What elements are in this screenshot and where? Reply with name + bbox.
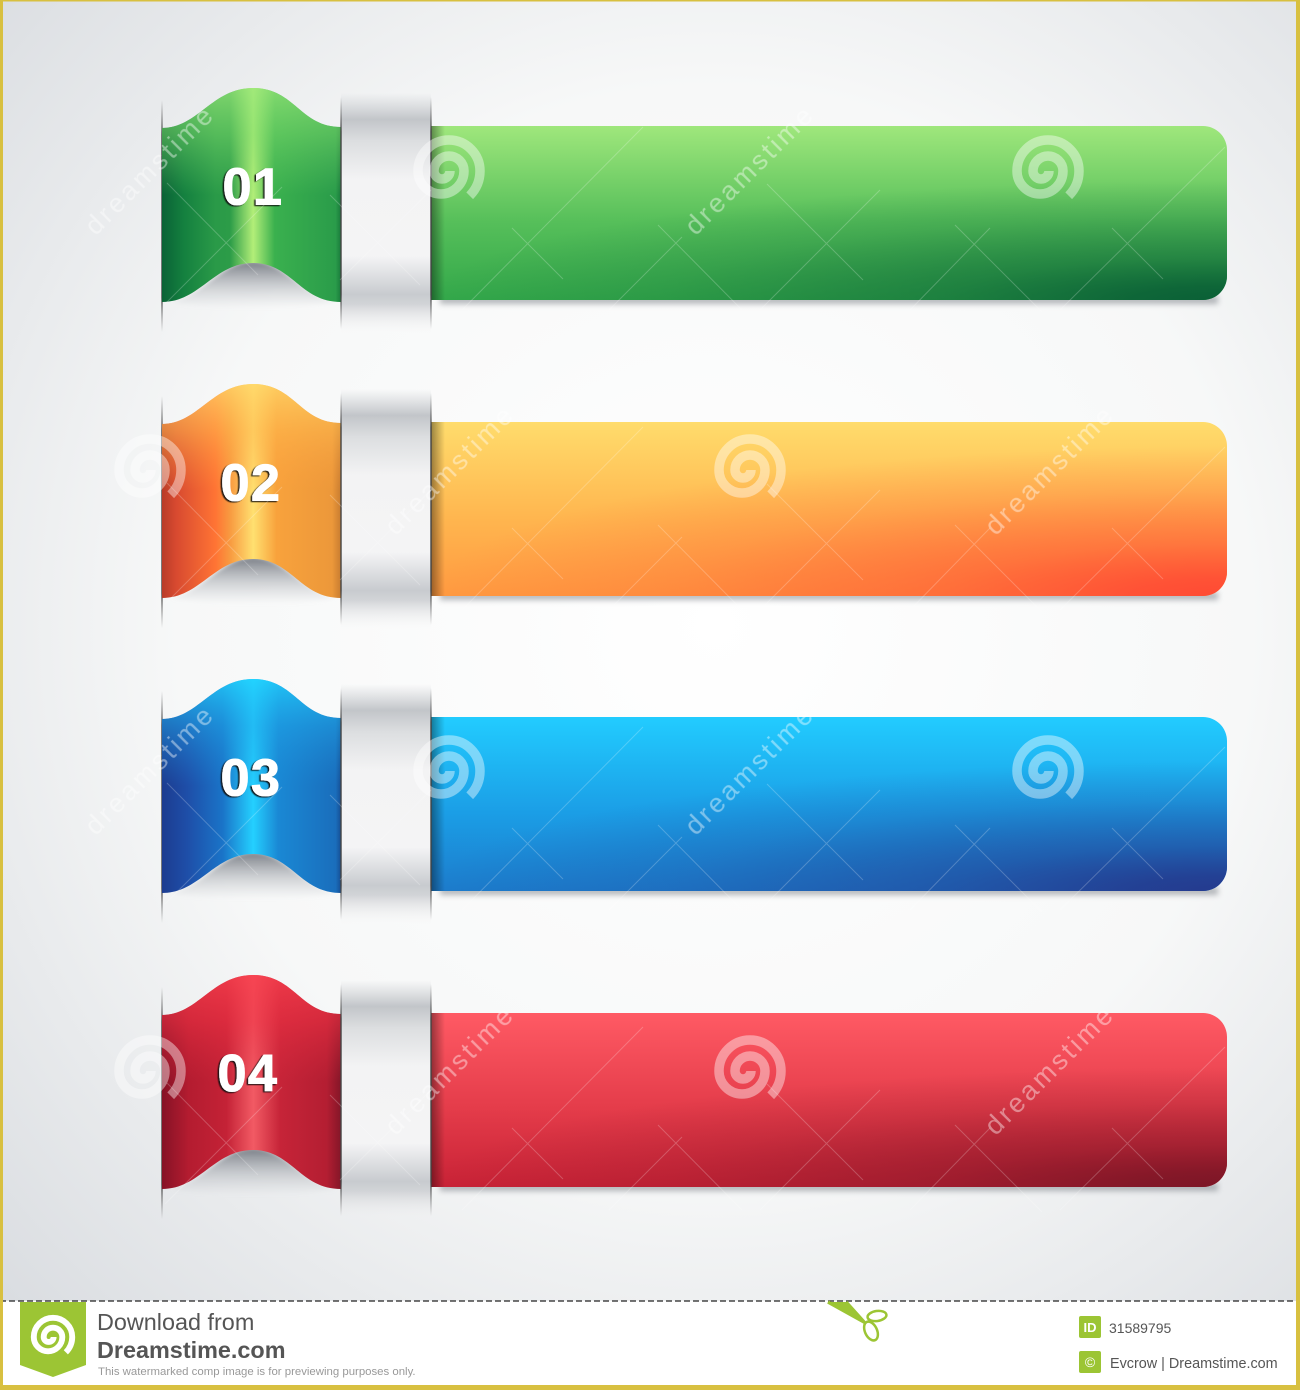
brand name: Dreamstime.com [97,1337,286,1363]
footer [0,1301,1300,1390]
banner row 2: orange [161,384,1227,629]
number 04: 04 [218,1045,278,1103]
left slit [161,691,163,923]
watermark text: dreamstime [79,699,221,841]
paper band [340,684,432,924]
bar [431,422,1227,596]
number 01: 01 [223,158,283,216]
dashed cut line [0,1300,1300,1302]
image id: 31589795 [1109,1320,1172,1336]
bar [431,126,1227,300]
paper band [340,980,432,1220]
ribbon tab [162,88,341,302]
download heading: Download from [97,1309,254,1335]
ribbon shadow [172,852,336,899]
bar shadow [440,592,1218,600]
disclaimer: This watermarked comp image is for previewing purposes only. [98,1366,416,1378]
icon: copyright badge: © [1085,1354,1096,1370]
icon: scissors [828,1302,887,1343]
left slit [161,987,163,1219]
watermark text: dreamstime [79,99,221,241]
bar [431,1013,1227,1187]
watermark text: dreamstime [679,699,821,841]
icon: copyright badge [1079,1351,1101,1373]
watermark text: dreamstime [379,399,521,541]
ribbon tab [162,384,341,598]
paper band [340,93,432,333]
watermark cross lines [165,127,1225,1212]
author credit: Evcrow | Dreamstime.com [1110,1356,1278,1372]
paper band [340,389,432,629]
number 03: 03 [221,750,281,808]
ribbon shadow [172,261,336,308]
icon: id badge: ID [1084,1320,1096,1335]
bar shadow [440,1183,1218,1191]
banner row 4: red [161,975,1227,1220]
watermark text: dreamstime [979,399,1121,541]
left slit [161,100,163,332]
banner row 1: green [161,88,1227,333]
watermark text: dreamstime [679,99,821,241]
bar [431,717,1227,891]
left slit [161,396,163,628]
watermark spirals [119,140,1079,1096]
banner row 3: blue [161,679,1227,924]
logo badge [20,1302,86,1377]
watermark text: dreamstime [979,999,1121,1141]
watermark overlay [79,99,1225,1212]
footer panel [0,1301,1300,1390]
ribbon shadow [172,557,336,604]
ribbon shadow [172,1148,336,1195]
icon: id badge [1079,1316,1101,1338]
ribbon tab [162,975,341,1189]
bar shadow [440,887,1218,895]
watermark text: dreamstime [379,999,521,1141]
watermark text [79,99,1121,1141]
number 02: 02 [221,454,281,512]
ribbon tab [162,679,341,893]
bar shadow [440,296,1218,304]
